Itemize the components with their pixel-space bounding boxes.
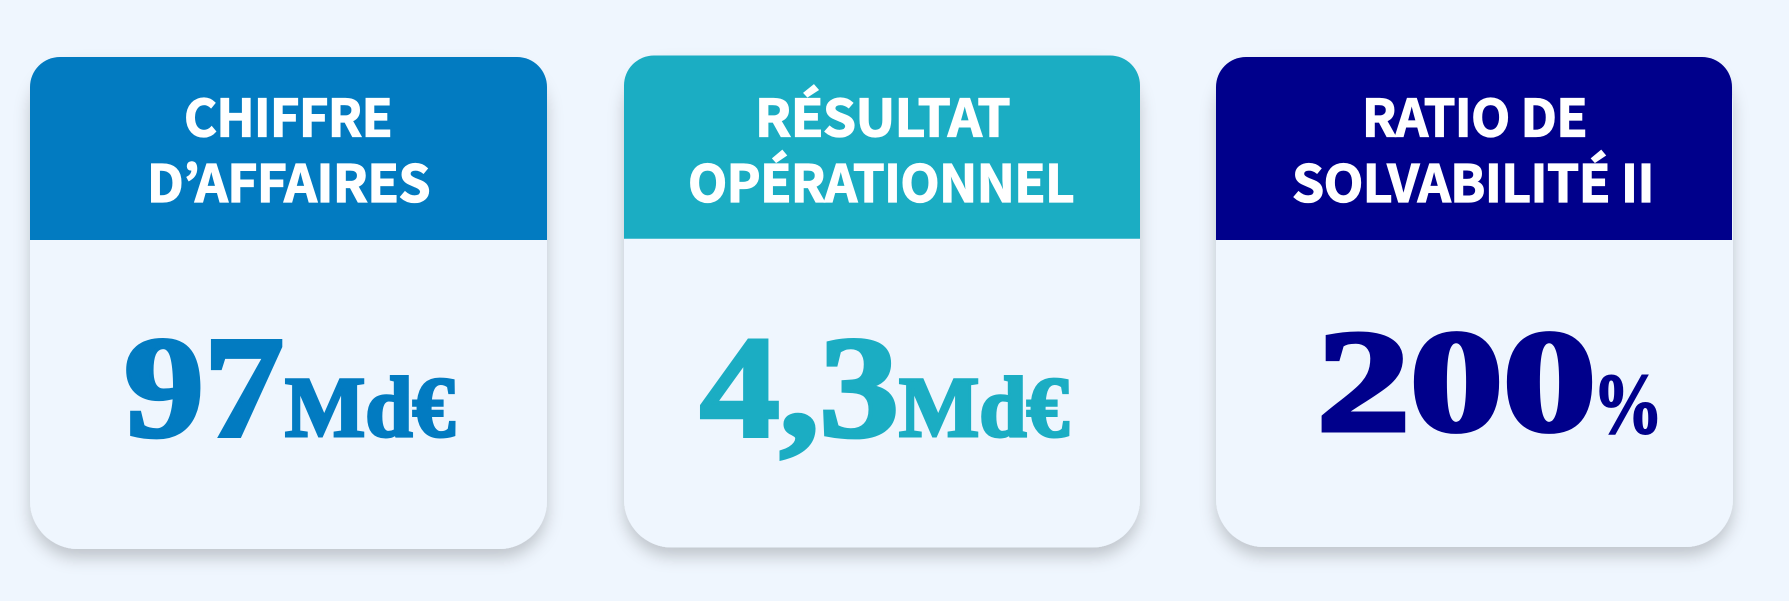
heading: SOLVABILITÉ II bbox=[1292, 143, 1654, 217]
heading bbox=[688, 78, 1074, 217]
value: 200 % bbox=[1317, 302, 1663, 462]
heading: CHIFFRE bbox=[184, 78, 392, 152]
value: 200 %: 200 bbox=[1317, 302, 1596, 462]
card body bbox=[1216, 57, 1733, 547]
heading: RATIO DE bbox=[1362, 78, 1587, 152]
value: 200 %: % bbox=[1593, 356, 1663, 452]
value: 97 Md€: Md€ bbox=[285, 359, 455, 455]
card body bbox=[624, 56, 1140, 548]
value: 4,3 Md€: Md€ bbox=[899, 359, 1069, 455]
card header bbox=[30, 57, 547, 240]
card header bbox=[1216, 57, 1732, 240]
heading: OPÉRATIONNEL bbox=[688, 143, 1074, 217]
panel: ratio de solvabilité II bbox=[1216, 57, 1733, 547]
heading: D’AFFAIRES bbox=[147, 143, 430, 217]
value: 97 Md€: 97 bbox=[124, 308, 284, 468]
panel: chiffre d'affaires bbox=[30, 57, 547, 549]
value: 4,3 Md€ bbox=[700, 308, 1069, 468]
value: 4,3 Md€: 4,3 bbox=[700, 308, 899, 468]
heading bbox=[1292, 78, 1654, 217]
heading: RÉSULTAT bbox=[755, 78, 1010, 152]
panel: résultat opérationnel bbox=[624, 56, 1140, 548]
card header bbox=[624, 56, 1140, 239]
card body bbox=[30, 57, 547, 549]
heading bbox=[147, 78, 430, 217]
value: 97 Md€ bbox=[124, 308, 455, 468]
